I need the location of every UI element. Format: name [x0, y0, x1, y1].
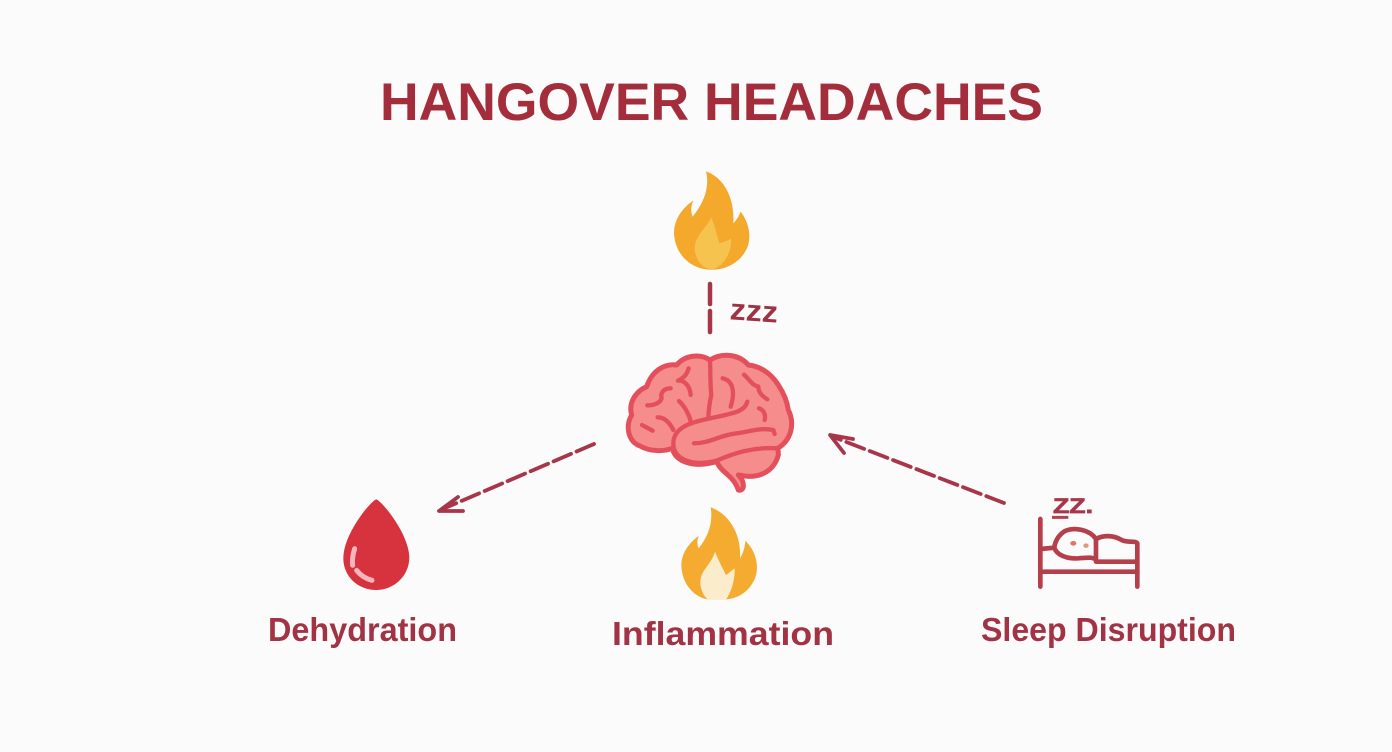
label: sleep disruption: Sleep Disruption — [981, 611, 1236, 648]
icon: lower flame — [681, 507, 757, 599]
icon: zzz text: zzz — [729, 293, 779, 330]
title: HANGOVER HEADACHES — [380, 73, 1043, 132]
arrow: vertical dashed connector — [708, 284, 712, 332]
icon: bed with sleeper — [1040, 517, 1137, 587]
icon: top flame — [674, 171, 749, 270]
arrow: sleep disruption to brain — [830, 435, 1004, 503]
label: dehydration: Dehydration — [268, 611, 457, 648]
icon: brain — [628, 355, 792, 490]
label: inflammation: Inflammation — [612, 615, 834, 652]
icon: sleep z letters: ZZ. — [1053, 495, 1093, 518]
icon: blood drop — [343, 499, 409, 590]
arrow: brain to dehydration — [439, 444, 594, 511]
